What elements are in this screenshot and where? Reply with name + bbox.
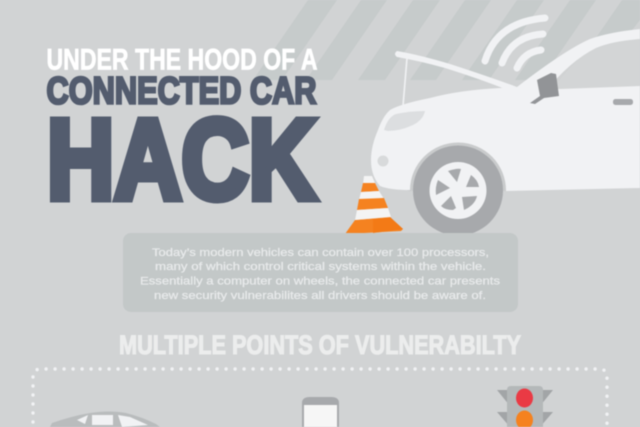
front wheel (413, 146, 503, 236)
cone base (345, 217, 403, 234)
title (46, 44, 318, 222)
red lens (516, 388, 533, 408)
cone shade (373, 217, 403, 233)
fog light (378, 156, 388, 166)
title line: under the hood of a: UNDER THE HOOD OF A (46, 44, 318, 76)
icon: traffic light (497, 386, 553, 427)
background diagonal stripes (253, 0, 640, 80)
housing (507, 386, 543, 427)
headlight (384, 111, 425, 131)
lower wings (497, 412, 553, 427)
panel background (123, 233, 518, 312)
icon: wifi signal (485, 18, 545, 68)
car roof pillar (517, 29, 640, 92)
intro paragraph: Today’s modern vehicles can contain over 100 processors, (152, 247, 489, 259)
door handle (613, 99, 633, 105)
intro paragraph (140, 247, 500, 302)
title line: hack: HACK (47, 96, 316, 222)
phone body (302, 397, 339, 427)
phone screen (304, 405, 337, 427)
car windows (77, 415, 148, 427)
car window (552, 36, 640, 90)
car silhouette (50, 412, 160, 427)
orange lens (516, 410, 533, 427)
dotted border panel (33, 369, 607, 427)
open hood (395, 51, 517, 89)
intro paragraph: many of which control critical systems within the vehicle. (155, 261, 486, 273)
hood prop strut (403, 58, 407, 106)
car body (371, 86, 640, 191)
illustration: white car with open hood (371, 29, 640, 236)
wheel arch (408, 141, 508, 191)
side mirror (530, 73, 559, 104)
intro text panel (123, 233, 518, 312)
section heading: MULTIPLE POINTS OF VULNERABILTY (119, 330, 521, 360)
cone stripes (355, 176, 391, 220)
icon: car (50, 412, 160, 427)
upper wings (497, 390, 553, 406)
title line: connected car: CONNECTED CAR (46, 70, 316, 112)
icon: traffic cone (345, 176, 403, 234)
intro paragraph: new security vulnerabilites all drivers should be aware of. (154, 290, 486, 302)
hub (430, 162, 486, 219)
intro paragraph: Essentially a computer on wheels, the connected car presents (140, 276, 500, 288)
hub openings (436, 169, 479, 210)
tyre (413, 146, 503, 236)
icon: smartphone (302, 397, 339, 427)
